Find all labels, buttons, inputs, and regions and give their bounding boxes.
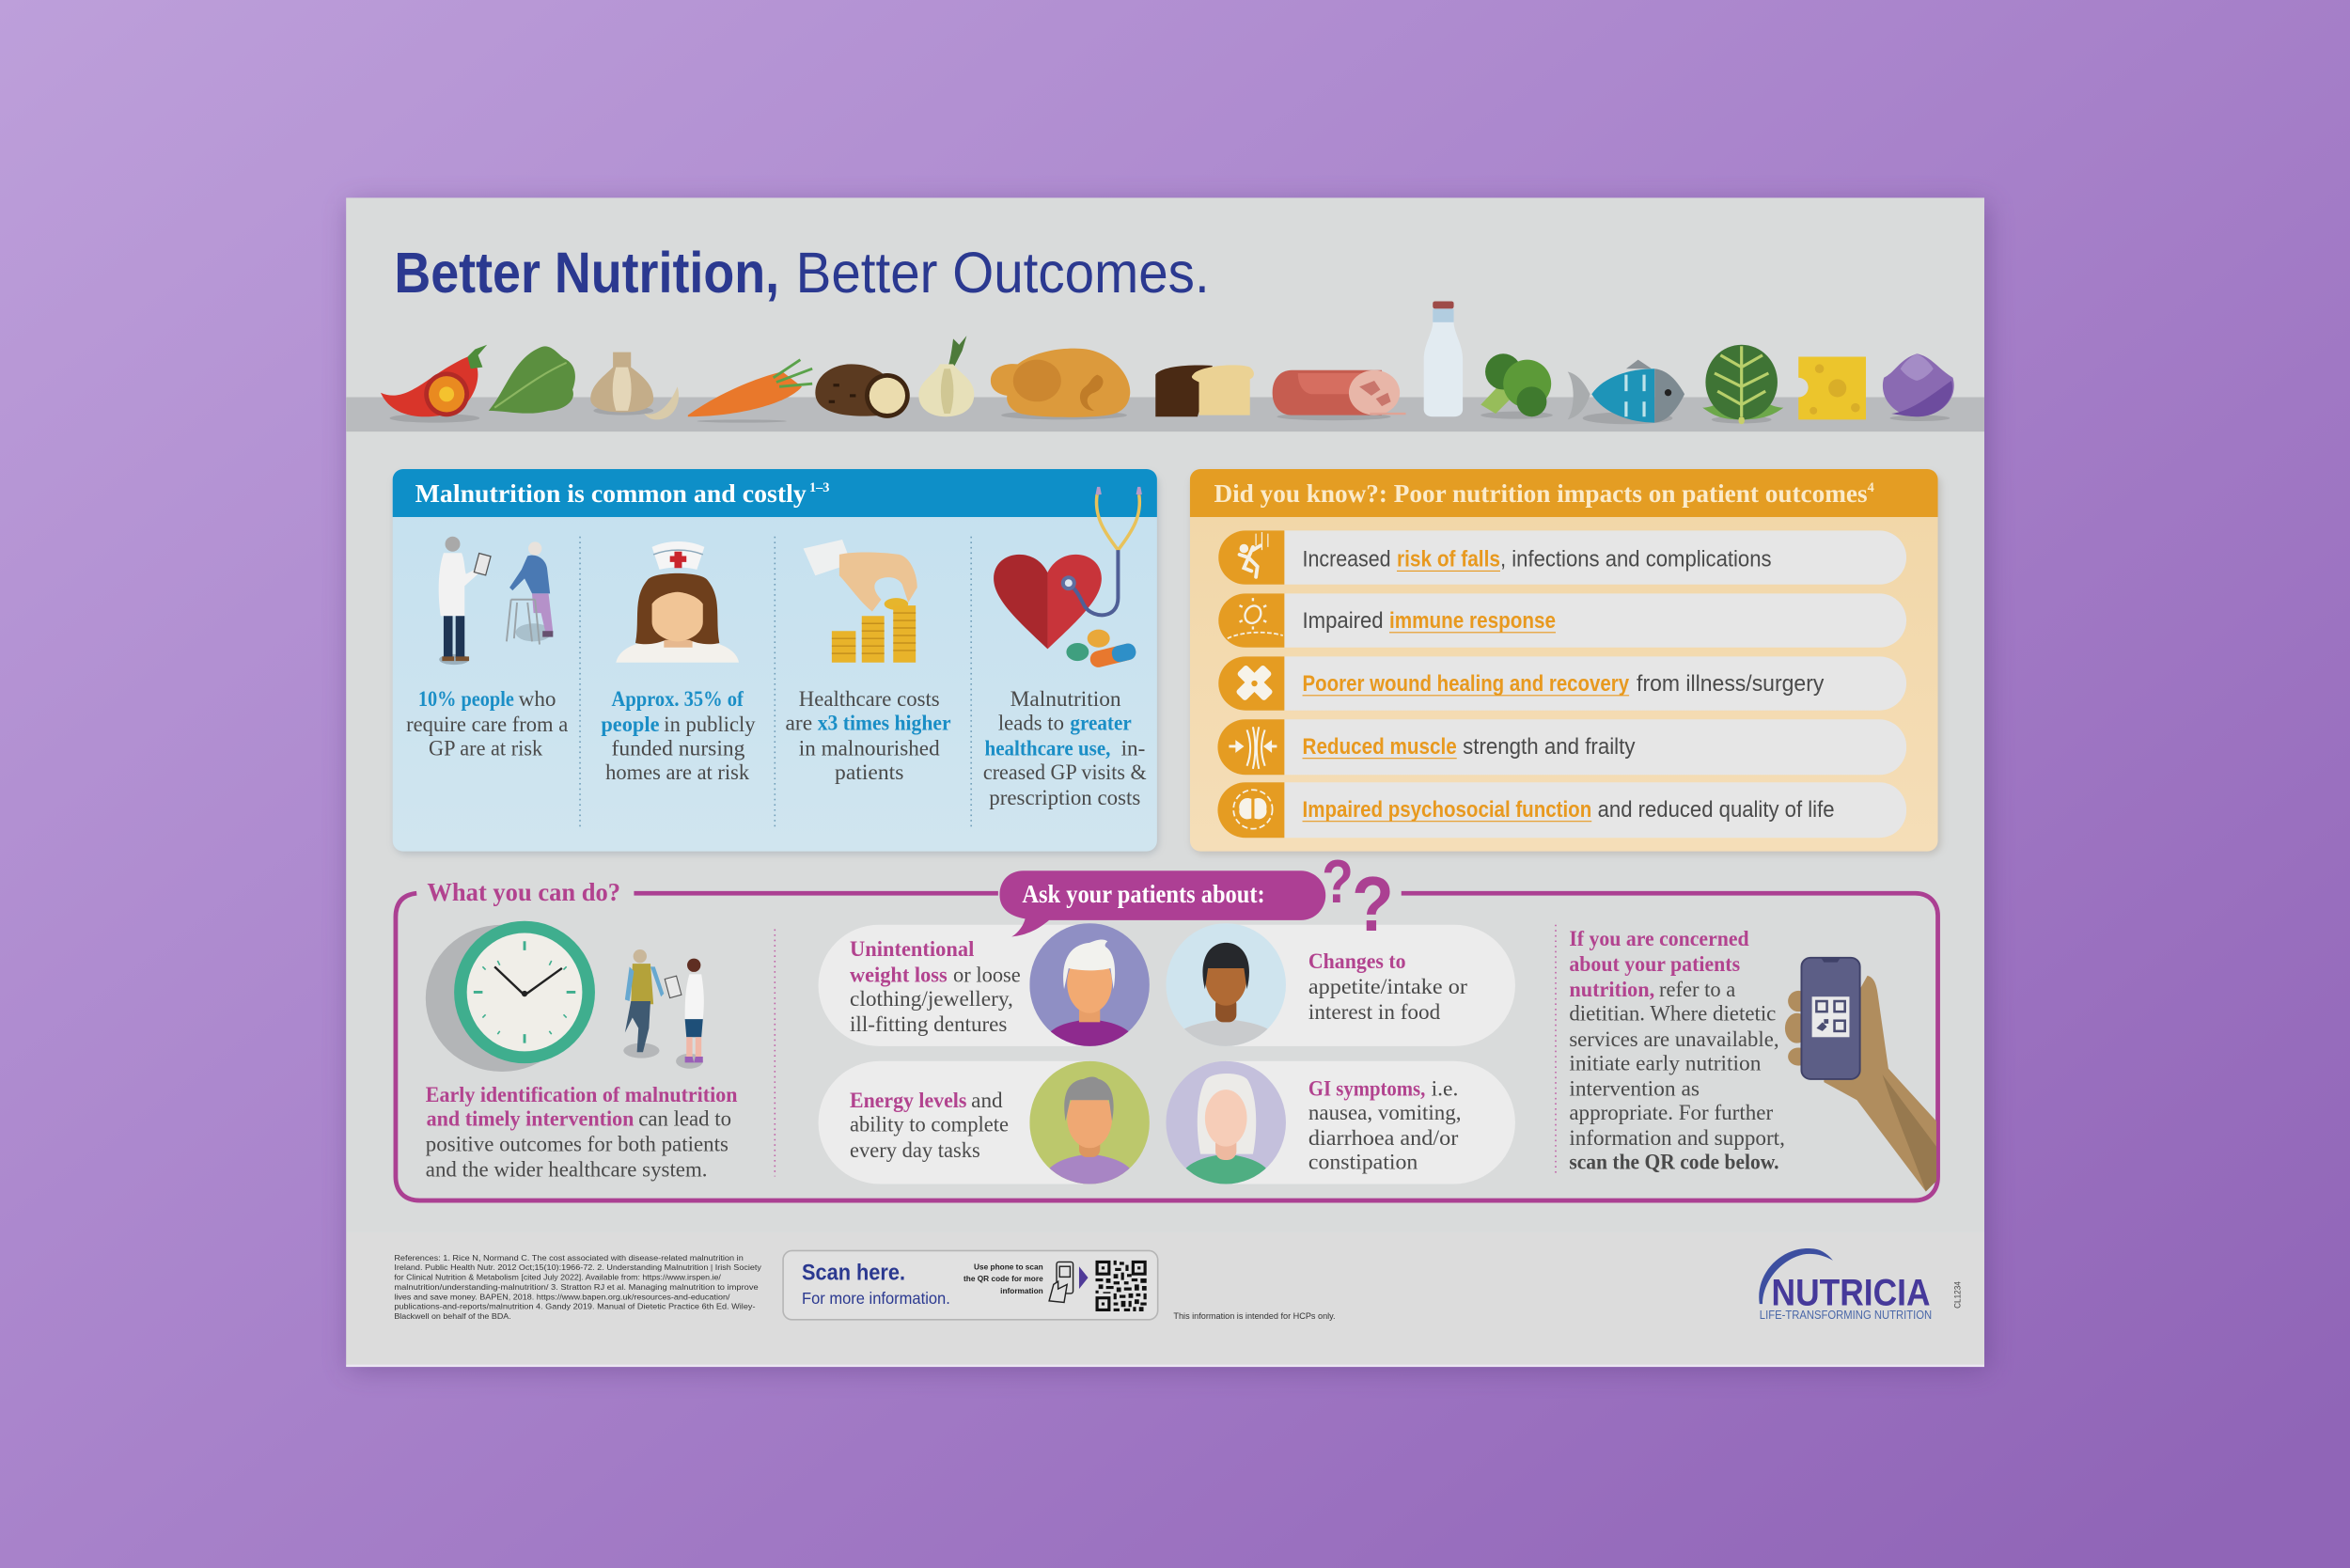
text: refer to dietitian: about your patients: [1569, 951, 1740, 976]
panel: what you can do frame: [396, 893, 1938, 1200]
text: refer to dietitian: intervention as: [1569, 1075, 1700, 1100]
icon: milk bottle: [1424, 301, 1463, 416]
scan here box: information: [1000, 1286, 1043, 1295]
text: healthcare costs: x3 times higher: [818, 710, 951, 734]
references: for Clinical Nutrition & Metabolism [cited July 2022]. Available from: https://www.irspen.ie/: [394, 1274, 722, 1282]
pill: changes to appetite: Changes to: [1308, 949, 1406, 973]
avatar: middle-aged man green: [1029, 1061, 1150, 1187]
row: immune response: immune response: [1389, 608, 1556, 634]
text: 10% people: require care from a: [406, 712, 568, 736]
icon: hand with coin stacks: [804, 540, 917, 663]
references: References: 1. Rice N, Normand C. The cost associated with disease-related malnutrition in: [394, 1254, 744, 1262]
pill: gi symptoms: GI symptoms,: [1308, 1075, 1425, 1100]
icon: red cabbage: [1883, 353, 1954, 421]
logo: nutricia: LIFE-TRANSFORMING NUTRITION: [1760, 1308, 1932, 1322]
avatar: younger man: [1166, 923, 1286, 1049]
pill: energy levels: every day tasks: [850, 1137, 980, 1162]
pill: energy levels: ability to complete: [850, 1112, 1009, 1137]
row: reduced muscle: strength and frailty: [1463, 734, 1636, 760]
panel header: malnutrition: Malnutrition is common and costly: [415, 479, 807, 508]
icon: phone in hand outline: [1049, 1262, 1073, 1302]
icon: qr code: [1095, 1261, 1147, 1311]
row: risk of falls: Increased: [1303, 547, 1391, 572]
row: psychosocial function: and reduced quality of life: [1598, 797, 1835, 823]
row: reduced muscle: [1217, 719, 1906, 775]
icon: falling person: [1240, 532, 1268, 577]
row: immune response: Impaired: [1303, 608, 1384, 634]
text: 10% people: [406, 686, 568, 760]
pill: energy levels: [819, 1061, 1150, 1187]
text: healthcare costs: Healthcare costs: [799, 686, 940, 711]
text: greater healthcare use: healthcare use,: [985, 736, 1110, 760]
icon: potato: [815, 364, 910, 418]
logo: nutricia: [1759, 1248, 1932, 1322]
panel header: did you know: Did you know?: Poor nutrition impacts on patient outcomes: [1214, 479, 1868, 508]
references: [394, 1254, 761, 1321]
title: Better Nutrition,: [394, 241, 779, 306]
references: publications-and-reports/malnutrition 4. Gandy 2019. Manual of Dietetic Practice 6th Ed. Wiley-: [394, 1303, 756, 1311]
row: wound healing: [1218, 656, 1906, 711]
references: malnutrition/understanding-malnutrition/ 3. Stratton RJ et al. Managing malnutrition to improve: [394, 1283, 759, 1292]
text: approx 35 percent: in publicly: [664, 712, 756, 736]
text: early identification: can lead to: [638, 1105, 731, 1130]
panel header: malnutrition: 1–3: [809, 480, 829, 495]
title: Better Outcomes.: [796, 241, 1210, 306]
text: 10% people: 10% people: [418, 686, 514, 711]
pill: gi symptoms: [1166, 1061, 1515, 1187]
row: risk of falls: [1218, 530, 1906, 585]
pill: gi symptoms: i.e.: [1432, 1075, 1458, 1100]
scan here box: [783, 1250, 1158, 1320]
row: wound healing: Poorer wound healing and recovery: [1303, 671, 1630, 697]
food shelf band: [346, 398, 1984, 431]
speech bubble: ask your patients: [999, 870, 1325, 936]
icon: cheese: [1798, 356, 1866, 419]
icon: question marks: ?: [1352, 860, 1394, 948]
logo: nutricia: NUTRICIA: [1772, 1273, 1931, 1314]
icon: spinach leaf: [489, 346, 575, 414]
text: 10% people: who: [519, 686, 556, 711]
row: psychosocial function: Impaired psychosocial function: [1303, 797, 1591, 823]
text: refer to dietitian: appropriate. For further: [1569, 1100, 1773, 1124]
icon: salami: [1273, 370, 1406, 420]
icon: question marks: [1322, 847, 1394, 948]
row: reduced muscle: Reduced muscle: [1303, 734, 1457, 760]
heading: what you can do: What you can do?: [427, 878, 620, 906]
text: healthcare costs: patients: [835, 760, 903, 784]
speech bubble: ask your patients: Ask your patients about:: [1022, 880, 1265, 908]
icon: doctor and patient with walker: [439, 537, 553, 665]
text: early identification: Early identification of malnutrition: [426, 1082, 738, 1106]
icon: roast chicken: [991, 349, 1130, 419]
pill: unintentional weight loss: or loose: [953, 962, 1021, 986]
pill: gi symptoms: nausea, vomiting,: [1308, 1100, 1462, 1124]
row: psychosocial function: [1217, 782, 1906, 838]
panel header: did you know: 4: [1868, 480, 1874, 495]
text: greater healthcare use: prescription costs: [989, 785, 1140, 809]
food row illustrations: [381, 301, 1954, 424]
text: greater healthcare use: creased GP visits &: [983, 760, 1147, 784]
icon: onion: [918, 336, 974, 416]
icon: patient and clinician: [623, 949, 704, 1069]
pill: energy levels: Energy levels: [850, 1088, 966, 1112]
references: Blackwell on behalf of the BDA.: [394, 1312, 511, 1321]
icon: heart, stethoscope and pills: [994, 487, 1140, 669]
references: lives and save money. BAPEN, 2018. https://www.bapen.org.uk/resources-and-education/: [394, 1293, 730, 1301]
title: [394, 241, 1210, 306]
text: early identification: [426, 1082, 738, 1182]
pill: gi symptoms: diarrhoea and/or: [1308, 1125, 1459, 1150]
avatar: older woman: [1166, 1061, 1286, 1187]
text: refer to dietitian: [1569, 926, 1785, 1174]
icon: hand holding phone with qr: [1785, 958, 1936, 1192]
references: Ireland. Public Health Nutr. 2012 Oct;15(10):1966-72. 2. Understanding Malnutrition | Irish Society: [394, 1263, 761, 1272]
avatar: older man purple: [1029, 923, 1150, 1049]
row: risk of falls: risk of falls: [1397, 547, 1500, 572]
text: early identification: and the wider healthcare system.: [426, 1157, 708, 1182]
icon: carrot: [688, 360, 812, 423]
icon: clock: [426, 921, 595, 1072]
text: refer to dietitian: information and support,: [1569, 1125, 1785, 1150]
scan here box: the QR code for more: [964, 1274, 1043, 1283]
text: refer to dietitian: scan the QR code below.: [1569, 1150, 1779, 1174]
job code: CL1234: [1952, 1281, 1962, 1309]
text: approx 35 percent: people: [601, 712, 660, 736]
text: approx 35 percent: [601, 686, 756, 784]
scan here box: For more information.: [802, 1289, 950, 1308]
text: early identification: and timely intervention: [427, 1105, 634, 1130]
text: approx 35 percent: funded nursing: [612, 736, 745, 760]
icon: question marks: ?: [1322, 847, 1354, 916]
icon: garlic: [590, 353, 679, 419]
row: risk of falls: , infections and complications: [1500, 547, 1772, 572]
pill: changes to appetite: appetite/intake or: [1308, 974, 1467, 998]
scan here box: Use phone to scan: [974, 1262, 1043, 1271]
text: refer to dietitian: nutrition,: [1569, 977, 1654, 1001]
icon: nurse: [616, 541, 739, 663]
text: approx 35 percent: homes are at risk: [605, 760, 750, 784]
row: wound healing: from illness/surgery: [1637, 671, 1824, 697]
arrow: [1079, 1266, 1089, 1289]
pill: changes to appetite: [1166, 923, 1515, 1049]
pill: unintentional weight loss: clothing/jewellery,: [850, 986, 1013, 1011]
text: greater healthcare use: in-: [1121, 736, 1145, 760]
icon: brain in dashed circle: [1233, 790, 1273, 829]
scan here box: Scan here.: [802, 1261, 905, 1286]
row: immune response: [1218, 593, 1906, 648]
icon: lettuce: [1702, 345, 1783, 424]
text: greater healthcare use: greater: [1070, 710, 1132, 734]
text: approx 35 percent: Approx. 35% of: [612, 686, 744, 711]
text: 10% people: GP are at risk: [429, 736, 543, 760]
text: refer to dietitian: services are unavailable,: [1569, 1027, 1779, 1051]
text: greater healthcare use: [983, 686, 1147, 809]
text: healthcare costs: [785, 686, 951, 784]
text: refer to dietitian: dietitian. Where dietetic: [1569, 1001, 1776, 1026]
icon: muscle compression arrows: [1229, 727, 1277, 769]
pill: unintentional weight loss: Unintentional: [850, 936, 975, 961]
icon: immune barrier: [1228, 598, 1283, 638]
pill: gi symptoms: constipation: [1308, 1150, 1418, 1174]
pill: unintentional weight loss: [819, 923, 1150, 1049]
poster sheet: [346, 197, 1984, 1367]
panel header: malnutrition: [393, 469, 1157, 517]
pill: changes to appetite: interest in food: [1308, 999, 1441, 1024]
text: healthcare costs: in malnourished: [799, 736, 940, 760]
icon: crossed bandage: [1235, 665, 1274, 701]
text: healthcare costs: are: [785, 710, 812, 734]
text: refer to dietitian: refer to a: [1659, 977, 1735, 1001]
text: early identification: positive outcomes for both patients: [426, 1131, 728, 1155]
pill: unintentional weight loss: ill-fitting dentures: [850, 1011, 1007, 1036]
pill: energy levels: and: [971, 1088, 1003, 1112]
text: refer to dietitian: initiate early nutrition: [1569, 1050, 1762, 1074]
panel: did you know: [1190, 469, 1941, 855]
panel: malnutrition is common and costly: [393, 469, 1158, 855]
text: refer to dietitian: If you are concerned: [1569, 926, 1749, 950]
icon: bread loaf: [1155, 365, 1254, 416]
pill: unintentional weight loss: weight loss: [850, 962, 948, 986]
text: greater healthcare use: leads to: [998, 710, 1064, 734]
hcp disclaimer: This information is intended for HCPs only.: [1173, 1311, 1336, 1322]
icon: fish: [1568, 360, 1684, 424]
icon: broccoli: [1480, 353, 1553, 419]
icon: chilli pepper: [381, 345, 487, 423]
panel header: did you know: [1190, 469, 1938, 517]
paper shadow: [349, 204, 1987, 1370]
text: greater healthcare use: Malnutrition: [1010, 686, 1121, 711]
